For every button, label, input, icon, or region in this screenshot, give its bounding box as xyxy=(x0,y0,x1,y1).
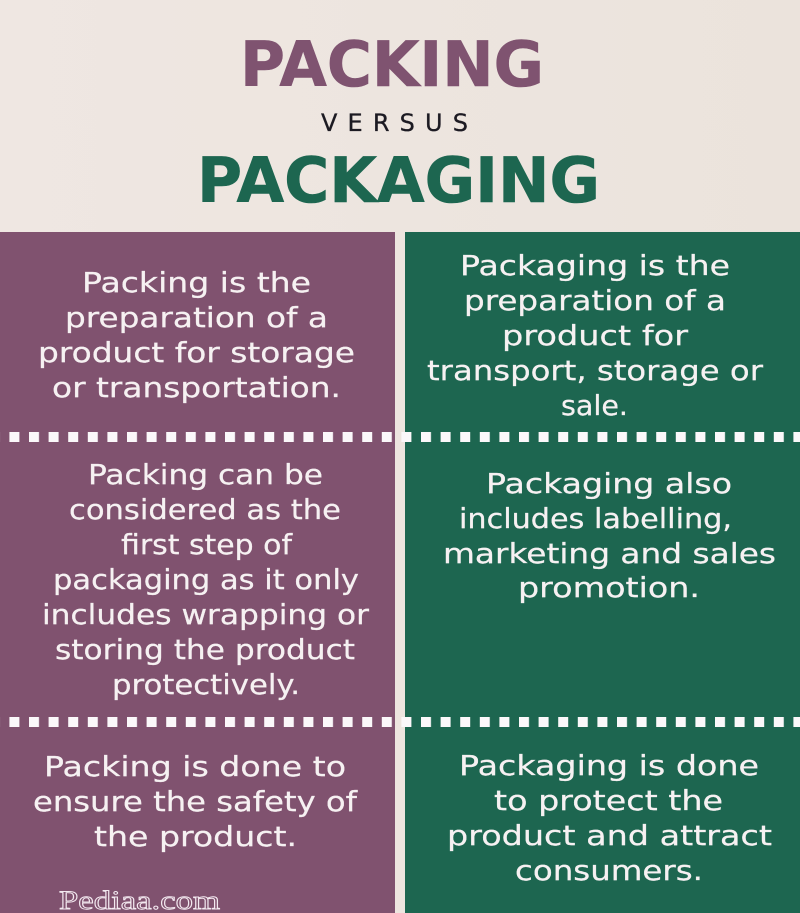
text: packaging purpose xyxy=(447,749,772,887)
text: packing scope xyxy=(42,458,370,701)
text: packaging scope: Packaging also xyxy=(486,467,732,500)
text: packing scope: Packing can be xyxy=(88,458,323,491)
text: packaging definition: product for xyxy=(502,319,689,352)
text: packaging definition: Packaging is the xyxy=(460,249,730,282)
text: packaging purpose: Packaging is done xyxy=(459,749,759,782)
text: packing purpose: ensure the safety of xyxy=(33,785,358,818)
subtitle: versus: VERSUS xyxy=(321,109,468,137)
text: packaging definition: preparation of a xyxy=(464,284,726,317)
panel: packaging column xyxy=(405,232,800,913)
text: packing definition: preparation of a xyxy=(65,301,328,334)
text: packaging scope: promotion. xyxy=(518,571,700,604)
text: packing scope: first step of xyxy=(121,528,293,561)
text: packing purpose: Packing is done to xyxy=(44,750,346,783)
title: packaging: PACKAGING xyxy=(197,144,600,217)
text: packaging purpose: product and attract xyxy=(447,819,772,852)
text: packing definition xyxy=(38,266,355,404)
text: packaging purpose: to protect the xyxy=(494,784,723,817)
text: packaging definition xyxy=(427,249,764,422)
text: packaging scope xyxy=(443,467,776,604)
text: packaging scope: marketing and sales xyxy=(443,537,776,570)
title: packing: PACKING xyxy=(240,28,544,101)
text: packaging scope: includes labelling, xyxy=(459,502,732,535)
text: packaging definition: transport, storage or xyxy=(427,354,764,387)
text: packing definition: Packing is the xyxy=(82,266,311,299)
text: packing purpose xyxy=(33,750,358,853)
text: packing scope: considered as the xyxy=(69,493,341,526)
text: packing scope: packaging as it only xyxy=(53,563,359,596)
text: packing scope: storing the product xyxy=(55,633,355,666)
text: packing scope: includes wrapping or xyxy=(42,598,370,631)
text: packing scope: protectively. xyxy=(112,668,300,701)
text: packaging definition: sale. xyxy=(561,389,628,422)
text: packing purpose: the product. xyxy=(94,820,297,853)
text: packing definition: or transportation. xyxy=(52,371,341,404)
panel: packing column xyxy=(0,232,395,913)
text: packing definition: product for storage xyxy=(38,336,355,369)
text: packaging purpose: consumers. xyxy=(515,854,703,887)
